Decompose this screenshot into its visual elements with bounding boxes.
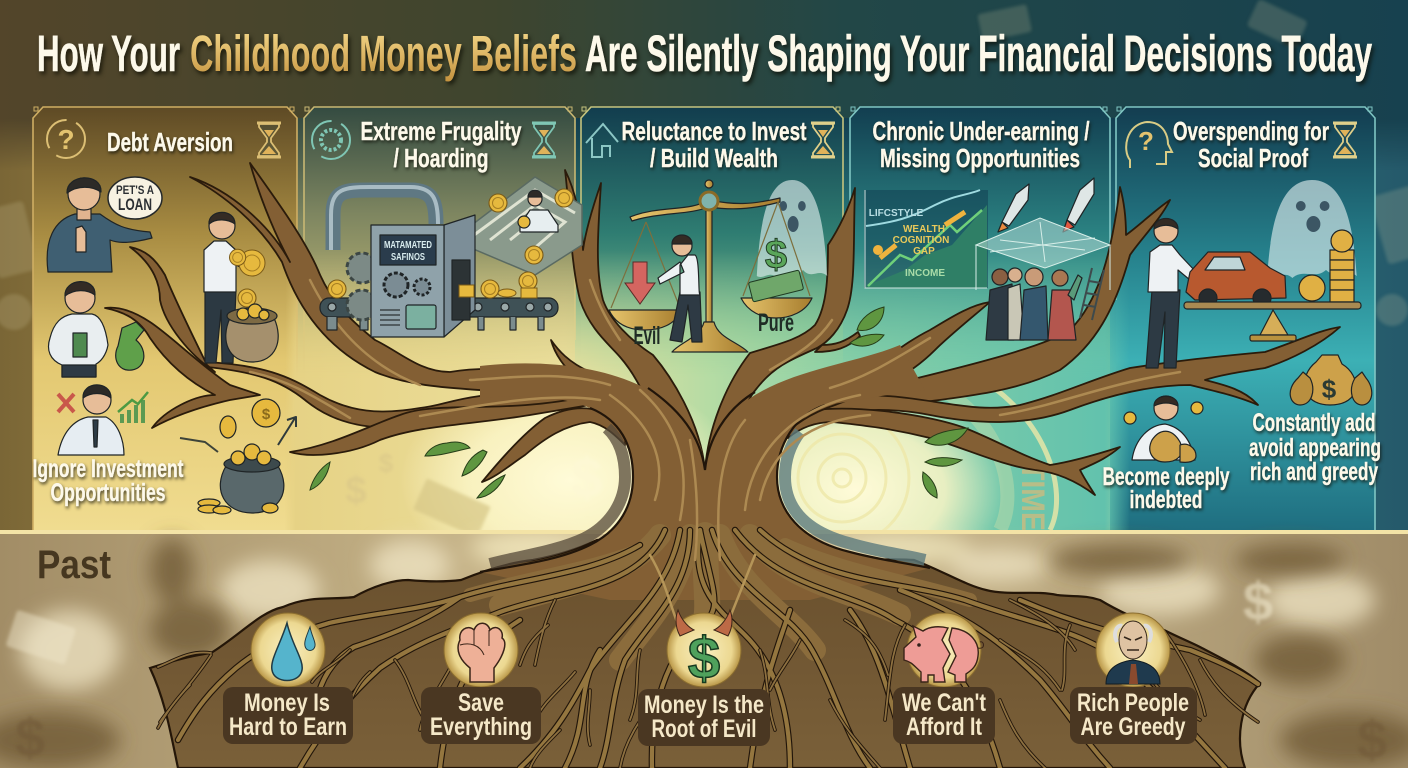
root belief: root of evil: $ <box>688 626 720 691</box>
machine: MATAMATED <box>384 240 432 251</box>
man ignoring investments <box>58 385 124 455</box>
root belief: rich people are greedy <box>1070 613 1197 744</box>
dollar and bills <box>748 233 804 302</box>
heading: chronic under-earning <box>872 116 1090 173</box>
icon: hourglass 2 <box>532 123 556 157</box>
heading: overspending <box>1173 116 1329 173</box>
tree roots base <box>150 540 1260 768</box>
root belief: we can't afford it: We Can't <box>902 689 987 717</box>
scene: wealth gap <box>864 178 1110 340</box>
ghost <box>1267 180 1357 278</box>
faded money symbols: $ <box>571 446 603 509</box>
money bags: $ <box>1322 374 1337 404</box>
panel icons <box>47 120 1357 168</box>
heading: reluctance to invest <box>622 116 807 173</box>
root belief: save everything: Save <box>458 689 504 717</box>
root belief: save everything <box>421 613 541 744</box>
root belief: rich people are greedy: Are Greedy <box>1080 713 1186 741</box>
title: How Your <box>37 25 180 82</box>
title <box>37 25 1372 82</box>
red cross <box>58 394 74 412</box>
faded money symbols: $ <box>345 470 367 512</box>
glass ceiling <box>976 218 1110 290</box>
chart panel <box>864 190 988 288</box>
coins on conveyor <box>328 272 537 298</box>
wood streaks <box>250 280 1180 630</box>
scene: social proof <box>1102 180 1381 514</box>
ladder <box>1080 268 1104 320</box>
panel: debt aversion <box>33 107 297 530</box>
root belief: rich people are greedy: Rich People <box>1077 689 1189 717</box>
speech bubble: LOAN <box>118 195 152 214</box>
standing man with coin <box>204 212 250 363</box>
pipe <box>331 187 438 250</box>
time dial <box>775 370 1057 545</box>
label: become deeply indebted: Become deeply <box>1102 463 1230 491</box>
growth chart <box>118 392 148 423</box>
label: constantly add <box>1249 409 1381 486</box>
rockets <box>998 178 1094 232</box>
scene: moral scale <box>609 180 827 352</box>
ghost <box>757 180 827 278</box>
dollar and bills: $ <box>765 233 787 277</box>
red car <box>1186 252 1286 307</box>
label: ignore investment <box>32 455 184 507</box>
root belief: we can't afford it <box>893 613 995 744</box>
clay pot <box>226 304 278 362</box>
icon: house <box>586 124 618 157</box>
root belief: money is hard to earn: Hard to Earn <box>229 713 347 741</box>
indebted man <box>1124 396 1203 462</box>
divider line <box>0 530 1408 534</box>
time dial: TIME <box>1015 463 1051 531</box>
chart panel: INCOME <box>905 268 945 279</box>
root belief: money is hard to earn: Money Is <box>244 689 330 717</box>
icon: hourglass 3 <box>811 123 835 157</box>
green money bag <box>116 322 144 370</box>
icon: gears cycle <box>312 121 350 159</box>
scale <box>609 180 812 352</box>
chart panel: GAP <box>913 246 935 257</box>
scene: savings machine <box>320 177 582 337</box>
label: become deeply indebted <box>1102 463 1230 514</box>
heading: overspending: Overspending for <box>1173 116 1329 146</box>
past ground <box>0 532 1408 768</box>
icon: hourglass 1 <box>257 123 281 157</box>
root belief: money is hard to earn <box>223 613 353 744</box>
coin stack <box>1299 230 1354 302</box>
root belief: save everything: Everything <box>430 713 532 741</box>
speech bubble <box>108 177 162 219</box>
dark pot of coins <box>180 399 296 514</box>
icon: hourglass 5 <box>1333 123 1357 157</box>
heading: reluctance to invest: / Build Wealth <box>650 143 778 173</box>
tree branches <box>105 163 1340 520</box>
speech bubble: PET'S A <box>116 183 154 197</box>
heading: reluctance to invest: Reluctance to Invest <box>622 116 807 146</box>
icon: question cycle <box>47 120 85 158</box>
worker in maze <box>518 190 558 232</box>
panel: extreme frugality <box>304 107 575 530</box>
scene: debt aversion figures <box>32 177 296 514</box>
machine <box>371 215 475 337</box>
icon: head question <box>1126 122 1172 168</box>
chart panel: COGNITION <box>893 235 949 246</box>
faded dollars in ground <box>15 572 1387 768</box>
panel: overspending <box>1116 107 1375 530</box>
root belief: root of evil <box>638 610 770 746</box>
balance plank <box>1184 302 1361 341</box>
chart panel: WEALTH <box>903 224 945 235</box>
labels: evil and pure <box>634 309 794 350</box>
gears <box>347 253 377 320</box>
man refusing a loan <box>47 178 152 272</box>
heading: past: Past <box>37 543 111 587</box>
root belief: root of evil: Money Is the <box>644 691 764 719</box>
crowd of people <box>986 268 1082 340</box>
leaves <box>310 307 968 498</box>
central glow blending panels <box>289 257 1127 530</box>
panel: reluctance to invest <box>581 107 843 530</box>
labels: evil and pure: Pure <box>758 309 794 337</box>
root flows <box>470 535 970 660</box>
red arrow <box>625 262 655 304</box>
heading: extreme frugality: / Hoarding <box>394 143 488 173</box>
heading: debt aversion: Debt Aversion <box>107 127 233 157</box>
label: become deeply indebted: indebted <box>1130 486 1202 514</box>
icon: head question: ? <box>1138 126 1154 156</box>
money bags <box>1290 355 1372 405</box>
root lines <box>158 530 1258 768</box>
conveyor belt <box>320 298 558 330</box>
heading: chronic under-earning: Missing Opportunities <box>880 143 1080 173</box>
man counting cash <box>48 282 108 377</box>
background <box>0 0 1408 540</box>
heading: overspending: Social Proof <box>1198 143 1308 173</box>
icon: question cycle: ? <box>57 124 75 155</box>
coin being dropped <box>230 249 265 307</box>
heading: extreme frugality <box>360 116 522 173</box>
heading: extreme frugality: Extreme Frugality <box>360 116 522 146</box>
dark pot of coins: $ <box>262 406 271 423</box>
label: ignore investment: Ignore Investment <box>32 455 184 483</box>
title: Childhood Money Beliefs <box>190 25 577 82</box>
faded money symbols: $ <box>379 448 394 478</box>
machine: SAFINOS <box>391 252 425 263</box>
label: ignore investment: Opportunities <box>50 479 166 507</box>
faded dollars in ground: $ <box>1243 572 1273 632</box>
maze <box>452 177 582 275</box>
chart panel: LIFCSTYLE <box>869 208 924 219</box>
tree trunk <box>480 345 930 600</box>
man pushing car <box>1146 218 1196 368</box>
root belief: root of evil: Root of Evil <box>652 715 756 743</box>
panel: chronic under-earning <box>850 107 1110 530</box>
man tilting scale <box>658 235 702 342</box>
panel headings <box>107 116 1329 173</box>
labels: evil and pure: Evil <box>634 322 660 350</box>
root belief: we can't afford it: Afford It <box>906 713 983 741</box>
faded money symbols <box>345 446 603 538</box>
heading: chronic under-earning: Chronic Under-earning / <box>872 116 1090 146</box>
faded dollars in ground: $ <box>15 708 45 768</box>
